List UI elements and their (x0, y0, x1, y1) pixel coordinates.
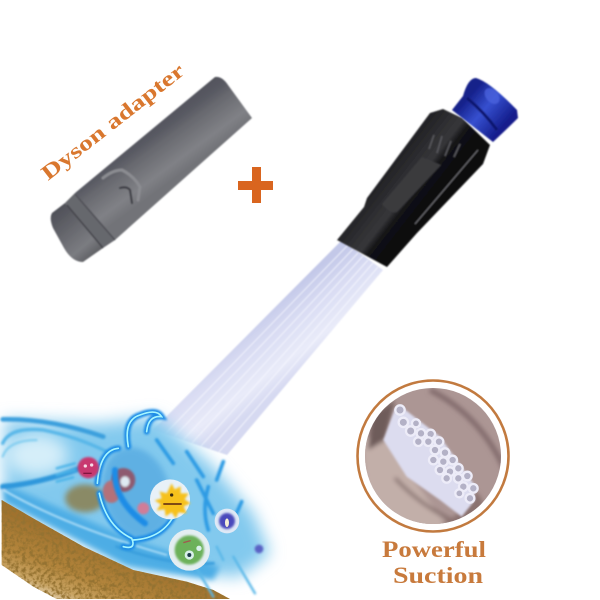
tube bundle (383, 405, 478, 517)
icon: plus sign (238, 167, 273, 203)
bristle tubes (153, 240, 383, 455)
germ: pink (78, 457, 99, 478)
body highlight (415, 150, 478, 224)
blue haze (3, 417, 270, 580)
body grip panel (382, 157, 441, 212)
cyclone centre (92, 440, 181, 547)
cyclone rings (97, 412, 242, 547)
caption: Powerful Suction: Suction (393, 563, 483, 588)
heading: Dyson adapter: Dyson adapter (36, 58, 189, 185)
panel: dust swirl scene (2, 412, 270, 599)
germ: yellow in bubble (150, 479, 191, 519)
adapter latch (103, 170, 140, 203)
germ: blue in bubble (215, 509, 239, 533)
germ: dark centre monsters (103, 468, 149, 514)
grip ridges (429, 135, 460, 157)
caption: Powerful Suction (382, 537, 486, 588)
swirl flow lines (3, 419, 255, 597)
icon: Dyson adapter tube (51, 77, 252, 262)
caption: Powerful Suction: Powerful (382, 537, 486, 562)
photo of tube ends on fingers (365, 388, 501, 524)
dirt patch (65, 484, 105, 512)
infographic canvas (0, 66, 519, 600)
germ: small blue (255, 545, 263, 553)
germ: green in bubble (169, 529, 210, 571)
sand ground (2, 500, 230, 599)
panel: powerful suction photo (358, 380, 510, 532)
photo ring (358, 380, 508, 532)
vacuum head: black body (337, 109, 490, 267)
vacuum head: blue cap (452, 78, 518, 142)
